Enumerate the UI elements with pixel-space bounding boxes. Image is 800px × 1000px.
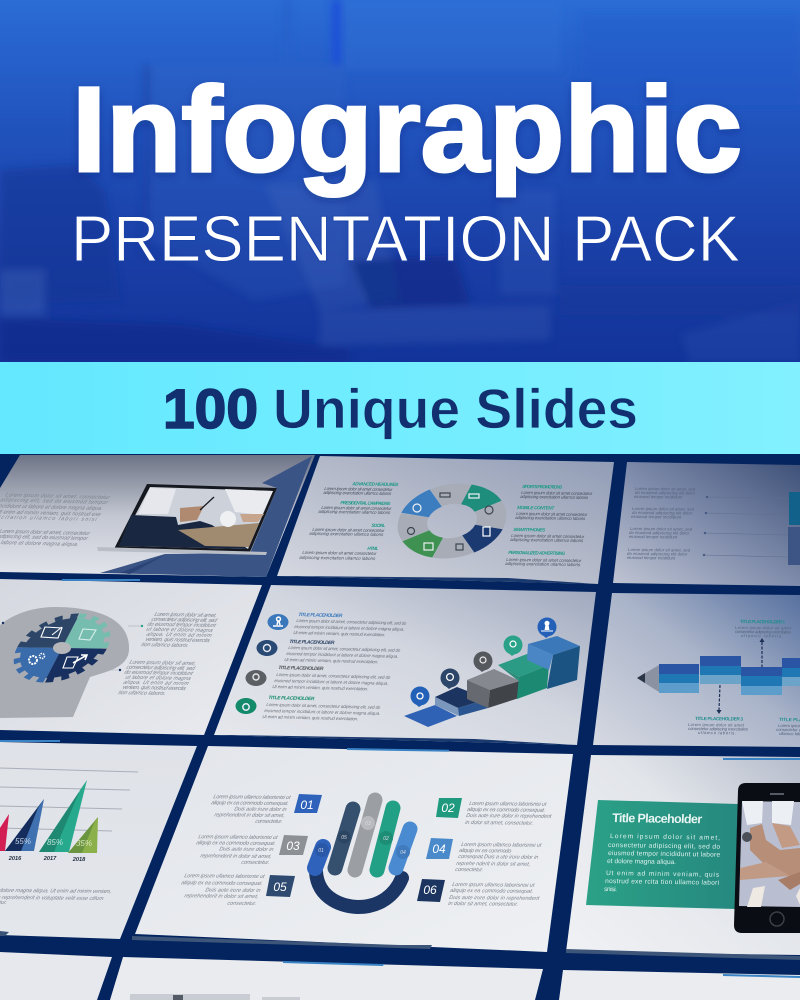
right text blocks: in dolor sit amet, consectetur. (465, 820, 534, 827)
text card: consectetur adipiscing elit, sed do (608, 842, 721, 851)
right text blocks: aliquip ex ea commodo consequat. (467, 807, 546, 814)
chart labels (8, 837, 92, 863)
hand labels: 04 (400, 850, 406, 856)
right text column: adipiscing exercitation ullamco laboris (520, 494, 590, 500)
panel: phone slide (566, 755, 800, 960)
text rows: do eiusmod adipiscing elit dolor (635, 490, 696, 496)
callout text: veniam, quis nostrud exercita (121, 685, 187, 692)
right text blocks: in dolor sit amet, consectetur. (448, 901, 519, 908)
text rows: eiusmod tempor incididunt (629, 534, 678, 539)
callout text: do eiusmod tempor incididunt (123, 670, 194, 677)
text rows: do eiusmod adipiscing elit dolor (627, 551, 688, 557)
panel: bottom right slide (559, 970, 800, 1000)
left text column: HTML (367, 546, 379, 551)
right text blocks: Lorem ipsum ullamco laborisnisi ut (452, 882, 535, 889)
list text: Ut enim ad minim veniam, quis nostrud exercitation. (293, 630, 386, 637)
right text blocks: Lorem ipsum ullamco laborisnisi ut (461, 842, 542, 849)
right text column: Lorem ipsum dolor sit amet consectetur (521, 490, 593, 496)
slide grid background (0, 454, 800, 1000)
number tags right: 06 (423, 883, 437, 897)
right text column: PERSONALIZED ADVERTISING (508, 550, 566, 556)
right text blocks: Duis aute irure dolor in reprehenderit (466, 813, 552, 820)
left text blocks (180, 794, 292, 907)
icon: phone (734, 783, 800, 933)
text card: Ut enim ad minim veniam, quis (606, 870, 720, 879)
left text column: Lorem ipsum dolor sit amet consectetur (321, 505, 393, 511)
list text: eiusmod tempor incididunt ut labore et dolore magna aliqua. (286, 651, 399, 659)
chart: triangles (0, 780, 98, 853)
number tags right: 02 (441, 801, 455, 815)
left text column: PRESIDENTIAL CAMPAIGNS (340, 500, 391, 506)
laptop text: Lorem ipsum dolor sit amet, consectetur (4, 493, 112, 501)
banner: 100 unique slides (0, 362, 800, 454)
left text column: adipiscing exercitation ullamco laboris (318, 509, 392, 515)
chart: pencil timeline (637, 656, 800, 695)
number tags left (266, 794, 322, 897)
text card: snisi. (604, 886, 617, 893)
text card: nostrud exe rcita tion ullamco labori (605, 878, 720, 887)
left text column: adipiscing exercitation ullamco laboris (299, 555, 377, 561)
callout text: Lorem ipsum dolor sit amet, (153, 612, 218, 619)
banner: 100 unique slides: Unique Slides (273, 377, 638, 440)
timeline labels: consectetur adipiscing exercitation (688, 726, 749, 732)
callout leader lines (2, 622, 143, 671)
color blocks (788, 492, 800, 565)
left text blocks: consectetur. (226, 901, 257, 907)
left text blocks: reprehenderit in dolor sit amet, (199, 853, 272, 860)
right text blocks: aliquip ex ea commodo consequat. (450, 888, 534, 895)
list text (262, 612, 408, 721)
right text column (505, 484, 593, 567)
text card: eiusmod tempor incididunt ut labore (608, 850, 721, 859)
panel: laptop slide (0, 455, 315, 577)
callout text: veniam, quis nostrud exercita (144, 637, 211, 644)
list text: Ut enim ad minim veniam, quis nostrud exercitation. (272, 684, 369, 691)
number tags left: 03 (286, 839, 300, 853)
callout text: aliqua. Ut enim ad minim (145, 632, 213, 639)
list text: TITLE PLACEHOLDER (288, 639, 336, 646)
list text: Lorem ipsum dolor sit amet, consectetur adipiscing elit, sed do (296, 618, 408, 626)
right text blocks: consequat.Duis a ute irure dolor in (458, 854, 539, 861)
arrow: down (716, 685, 722, 714)
left text column: adipiscing exercitation ullamco laboris (309, 531, 385, 537)
icon: laptop (97, 484, 277, 555)
panel: pencil timeline slide (593, 593, 800, 747)
panel: hand diagram slide (132, 746, 573, 952)
hand labels: 05 (341, 835, 347, 841)
text card: Title Placeholder (612, 811, 703, 826)
banner: 100 unique slides: 100 (163, 377, 258, 440)
right text blocks: consectetur. (455, 867, 484, 873)
callout text: ut labore et dolore magna (124, 675, 192, 682)
number tags left: 01 (300, 798, 314, 812)
chart caption (0, 888, 112, 906)
panel: triangle chart slide (0, 740, 197, 939)
laptop text: Lorem ipsum dolor sit amet, consectetur (0, 529, 92, 537)
callout text: tion ullamco laboris. (117, 690, 167, 697)
laptop text: adipiscing elit, sed do eiusmod tempor (0, 497, 110, 506)
left text blocks: consectetur. (240, 860, 270, 866)
subtitle: Presentation Pack: PRESENTATION PACK (71, 202, 740, 275)
number tags left: 05 (273, 880, 287, 894)
hand labels (318, 821, 406, 856)
text rows: eiusmod tempor incididunt (627, 555, 676, 560)
timeline labels: consectetur adipiscing exercitation (735, 629, 792, 635)
left text blocks: aliquip ex ea commodo consequat. (210, 800, 289, 807)
right text column: SPORTS PROMOTIONS (522, 484, 563, 490)
laptop text: rcitation ullamco labori snisi (0, 515, 98, 523)
hand labels: 03 (365, 821, 371, 827)
left text blocks: Lorem ipsum ullamco laborisnisi ut (212, 794, 292, 801)
left text column: adipiscing exercitation ullamco laboris (323, 490, 393, 496)
hand labels: 01 (318, 848, 324, 854)
list text: Lorem ipsum dolor sit amet, consectetur adipiscing elit, sed do (276, 672, 392, 680)
text rows (627, 486, 696, 560)
left text column: Lorem ipsum dolor sit amet consectetur (302, 550, 378, 556)
timeline labels: Lorem ipsum dolor sit amet (735, 625, 792, 631)
callout text: tion ullamco laboris. (140, 642, 190, 649)
right text column: adipiscing exercitation ullamco laboris (510, 537, 585, 543)
left text blocks: reprehenderit in dolor sit amet, (213, 812, 285, 819)
callout text: consectetur adipiscing elit, sed (150, 617, 219, 624)
chart labels: 35% (76, 839, 92, 848)
text rows: eiusmod tempor incididunt (631, 514, 682, 520)
list text: eiusmod tempor incididunt ut labore et dolore magna aliqua. (264, 708, 381, 716)
list item icons (236, 614, 288, 714)
chart labels: 85% (47, 838, 63, 847)
title: Infographic: Infographic (72, 61, 742, 197)
arrow: up (760, 638, 764, 667)
right text blocks: Lorem ipsum ullamco laborisnisi ut (469, 801, 547, 808)
timeline labels: TITLE PLACEHOLDER 1 (740, 619, 786, 624)
number tags right (417, 798, 462, 902)
right text column: Lorem ipsum dolor sit amet consectetur (506, 557, 582, 563)
leader lines (703, 496, 789, 557)
chart: puzzle ring (388, 482, 516, 560)
list text: TITLE PLACEHOLDER (297, 612, 344, 619)
timeline labels: ullamco laboris. (698, 730, 736, 735)
icon: map pins (410, 618, 556, 707)
left text blocks: Duis aute irure dolor in (233, 807, 287, 813)
list text: Ut enim ad minim veniam, quis nostrud exercitation. (284, 657, 379, 664)
gear quadrants (4, 615, 120, 681)
chart labels: 2018 (72, 857, 86, 863)
left text column: Lorem ipsum dolor sit amet consectetur (324, 486, 394, 492)
list text: TITLE PLACEHOLDER (277, 665, 325, 672)
chart: hand (315, 800, 410, 907)
head silhouette (0, 607, 129, 718)
right text column: Lorem ipsum dolor sit amet consectetur (511, 533, 585, 539)
list text: eiusmod tempor incididunt ut labore et dolore magna aliqua. (274, 678, 389, 686)
right text column: SMARTPHONES (513, 527, 546, 532)
laptop text (0, 493, 112, 548)
text card (586, 800, 738, 909)
left text column (299, 481, 399, 561)
panel: lines and blocks slide (613, 462, 800, 586)
timeline labels (688, 619, 800, 736)
timeline labels: TITLE PLACEHOLDER 3 (695, 716, 744, 721)
list text: Lorem ipsum dolor sit amet, consectetur adipiscing elit, sed do (266, 702, 382, 710)
left text blocks: Duis aute irure dolor in (218, 847, 274, 853)
chart caption: dolore magna aliqua. Ut enim ad minim veniam, (0, 888, 112, 895)
left text blocks: Lorem ipsum ullamco laborisnisi ut (183, 873, 266, 880)
callout text: ut labore et dolore magna (145, 627, 214, 634)
list text: Lorem ipsum dolor sit amet, consectetur adipiscing elit, sed do (288, 645, 402, 653)
right text blocks: Duis aute irure dolor in reprehenderit (449, 895, 540, 902)
timeline labels: ullamco laboris. (741, 633, 783, 638)
left text blocks: Lorem ipsum ullamco laborisnisi ut (197, 834, 279, 841)
text rows: Lorem ipsum dolor sit amet, sed (632, 506, 695, 512)
text rows: do eiusmod adipiscing elit dolor (629, 530, 690, 536)
left text blocks: consectetur. (254, 819, 283, 825)
right text blocks: aliquip ex ea commodo (459, 848, 512, 855)
callout text: aliqua. Ut enim ad minim (122, 680, 190, 687)
left text column: ADVANCED HEADLINES (352, 481, 399, 487)
ring icons (408, 493, 493, 550)
left text blocks: Duis aute irure dolor in (204, 888, 261, 894)
text rows: eiusmod tempor incididunt (634, 494, 683, 499)
chart labels: 55% (15, 837, 31, 846)
chart labels: 2017 (43, 856, 57, 862)
right text column: adipiscing exercitation ullamco laboris (515, 515, 587, 521)
left text column: SOCIAL (371, 523, 386, 528)
callout text (117, 612, 219, 697)
timeline labels: Lorem ipsum dolor sit amet (688, 722, 745, 728)
text rows: Lorem ipsum dolor sit amet, sed (630, 526, 693, 532)
left text blocks: aliquip ex ea commodo consequat. (180, 880, 263, 887)
right text column: Lorem ipsum dolor sit amet consectetur (516, 511, 588, 517)
right text column: adipiscing exercitation ullamco laboris (505, 561, 582, 567)
callout text: consectetur adipiscing elit, sed (125, 665, 197, 672)
left text blocks: reprehenderit in dolor sit amet, (183, 893, 259, 900)
right text blocks (448, 801, 552, 908)
panel: brain head slide (0, 579, 262, 735)
text card: et dolore magna aliqua. (607, 858, 676, 866)
hand labels: 02 (383, 836, 389, 842)
left text blocks: aliquip ex ea commodo consequat. (195, 840, 276, 847)
list text: TITLE PLACEHOLDER (267, 695, 316, 702)
chart gridlines (0, 768, 138, 831)
text rows: Lorem ipsum dolor sit amet, sed (628, 547, 691, 553)
hero background photo (0, 0, 800, 362)
panel: puzzle ring slide (277, 456, 614, 584)
callout text: do eiusmod tempor incididunt (146, 622, 217, 629)
text rows: do eiusmod adipiscing elit dolor (632, 510, 693, 516)
panel: staircase slide (214, 585, 596, 745)
chart labels: 2016 (8, 856, 22, 862)
text rows: Lorem ipsum dolor sit amet, sed (635, 486, 696, 492)
gear icons (29, 627, 96, 668)
list text: eiusmod tempor incididunt ut labore et dolore magna aliqua. (294, 624, 405, 632)
panel: bottom middle slide (110, 957, 543, 1000)
chart: staircase (404, 636, 580, 727)
right text column: MOBILE CONTENT (517, 505, 555, 511)
callout text: Lorem ipsum dolor sit amet, (128, 660, 197, 667)
list text: Ut enim ad minim veniam, quis nostrud exercitation. (262, 714, 359, 721)
text card: Lorem ipsum dolor sit amet, (610, 833, 720, 842)
number tags right: 04 (432, 842, 446, 856)
left text column: Lorem ipsum dolor sit amet consectetur (312, 527, 386, 533)
panel: bottom left slide (0, 952, 112, 1000)
right text blocks: reprehe nderit in dolor sit amet, (456, 861, 531, 868)
